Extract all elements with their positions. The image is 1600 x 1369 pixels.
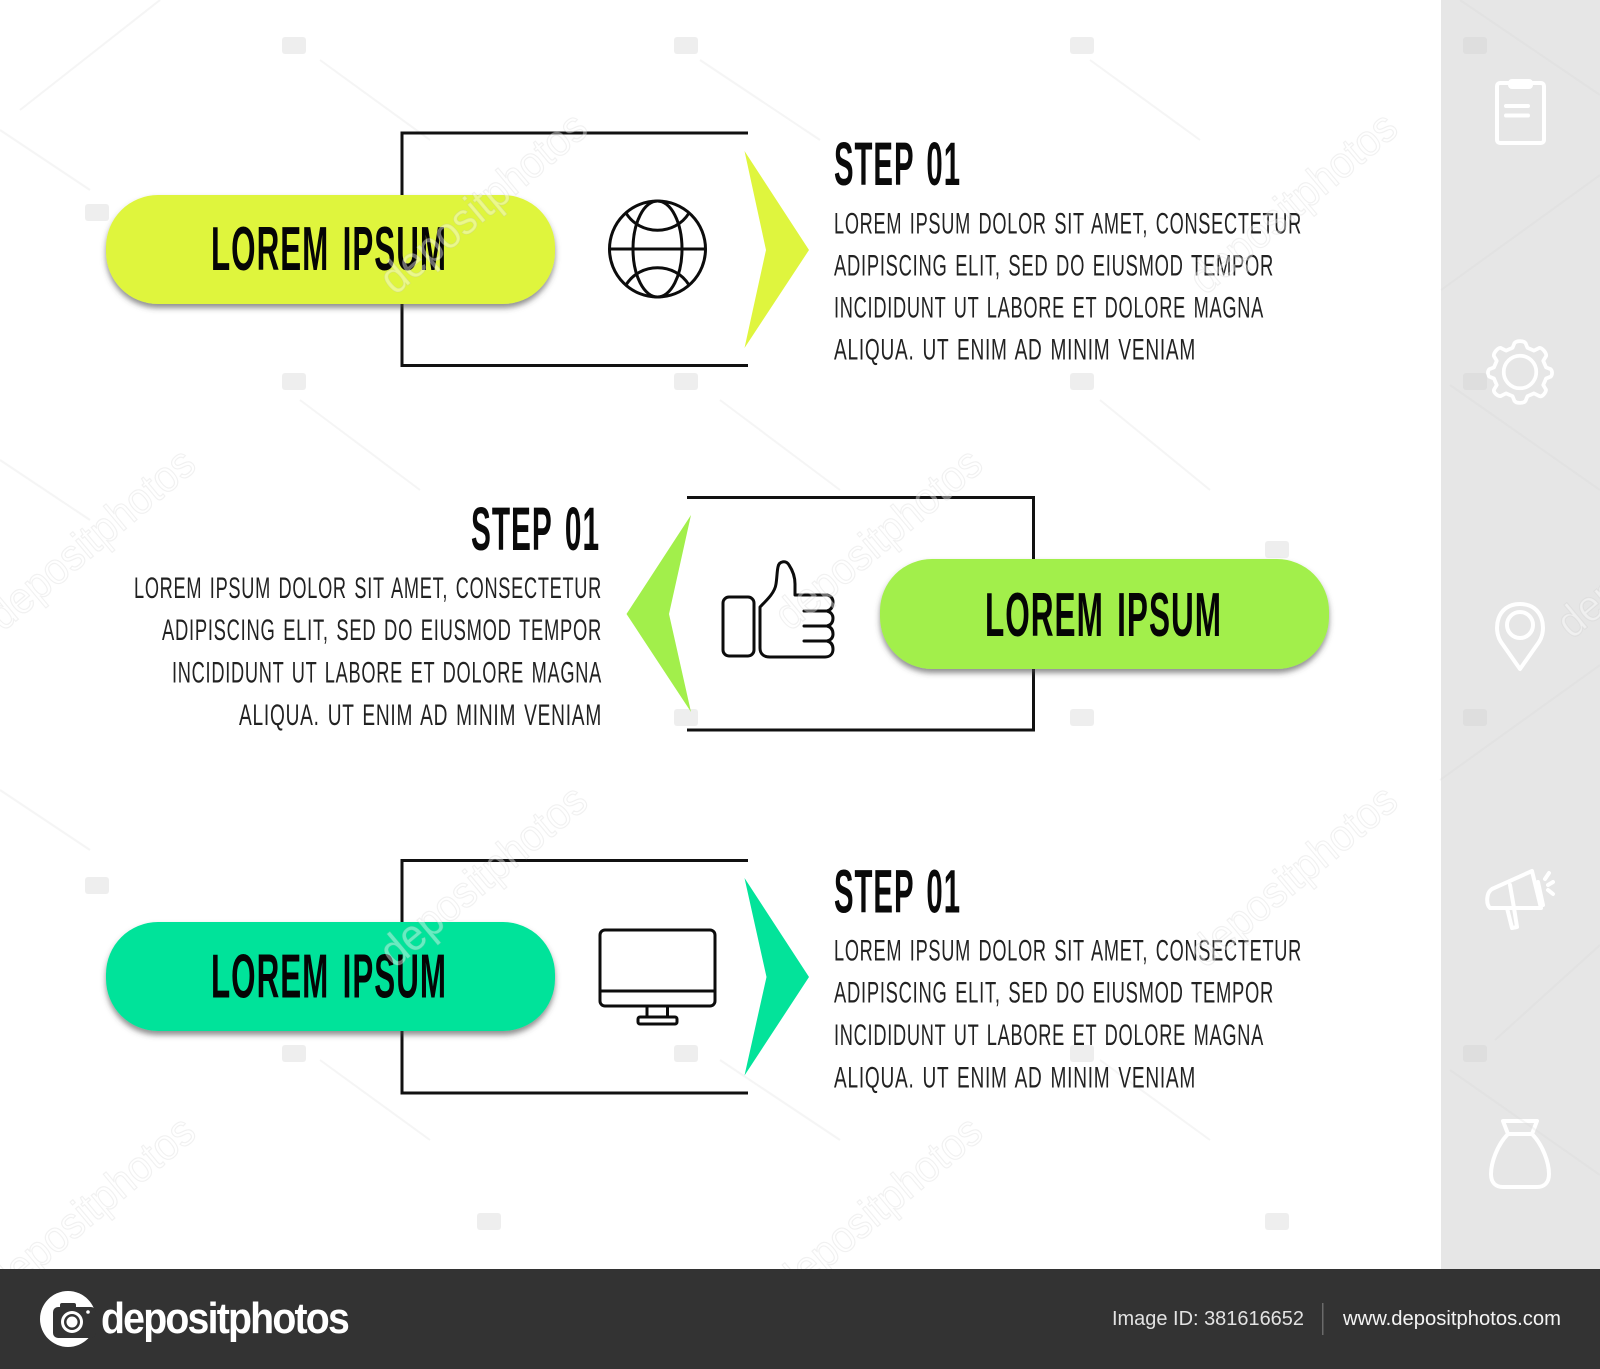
logo camera mark [40,1291,96,1347]
step 3: arrow [744,878,809,1076]
sidebar icon: clipboard [1497,81,1544,143]
step 1: text block: ALIQUA. UT ENIM AD MINIM VENIAM [834,334,1196,366]
watermark text: depositphotos [370,102,597,304]
step 2: text block: ADIPISCING ELIT, SED DO EIUSMOD TEMPOR [162,614,602,647]
footer separator [1322,1303,1324,1335]
step 1: icon globe [610,201,706,297]
footer image id: Image ID: 381616652 [1112,1308,1304,1330]
step 3: box outline [402,860,748,1093]
step 1: text block [834,130,1302,366]
step 2: text block: INCIDIDUNT UT LABORE ET DOLORE MAGNA [172,656,602,690]
watermark text: depositphotos [1180,775,1407,977]
sidebar icon: megaphone [1487,871,1553,928]
step 1: text block: INCIDIDUNT UT LABORE ET DOLORE MAGNA [834,292,1264,324]
step 1: label pill: LOREM IPSUM [211,215,447,284]
step 3: text block: ALIQUA. UT ENIM AD MINIM VENIAM [834,1062,1196,1094]
sidebar icon: gear [1488,341,1552,403]
sidebar icon: money bag [1491,1121,1549,1187]
step 1: text block: LOREM IPSUM DOLOR SIT AMET, CONSECTETUR [834,208,1302,240]
step 3: text block: STEP 01 [834,858,961,926]
step 3: icon monitor [600,930,715,1024]
logo wordmark: depositphotos [101,1294,348,1343]
watermark text: depositphotos [1180,102,1407,304]
text: STEP 01 [471,495,600,563]
step 2: arrow [626,515,691,712]
sidebar icon: location pin [1497,604,1543,669]
step 3: text block: ADIPISCING ELIT, SED DO EIUSMOD TEMPOR [834,976,1274,1010]
footer logo [40,1291,348,1347]
footer bar [0,1269,1600,1369]
step 2: text block: ALIQUA. UT ENIM AD MINIM VENIAM [239,699,602,732]
step 2: label pill: LOREM IPSUM [985,581,1222,650]
step 1: label pill [106,195,555,304]
step 3: text block: LOREM IPSUM DOLOR SIT AMET, CONSECTETUR [834,934,1302,968]
panel: right sidebar [1441,0,1600,1270]
step 2: label pill [880,559,1329,669]
step 3: text block: INCIDIDUNT UT LABORE ET DOLORE MAGNA [834,1019,1264,1052]
step 3: label pill [106,922,555,1031]
step 2: icon thumbs up [723,562,833,657]
step 2: text block [134,495,602,732]
step 2: text block: LOREM IPSUM DOLOR SIT AMET, CONSECTETUR [134,572,602,605]
step 1: arrow [744,151,809,348]
footer website: www.depositphotos.com [1342,1308,1561,1330]
step 1: text block: STEP 01 [834,130,961,198]
step 1: box outline [402,133,748,366]
watermark text: depositphotos [765,438,992,640]
watermark text: depositphotos [370,775,597,977]
step 3: label pill: LOREM IPSUM [211,942,447,1012]
step 2: box outline [687,498,1034,730]
step 1: text block: ADIPISCING ELIT, SED DO EIUSMOD TEMPOR [834,250,1274,282]
watermark text: depositphotos [765,1106,992,1308]
step 3: text block [834,858,1302,1094]
